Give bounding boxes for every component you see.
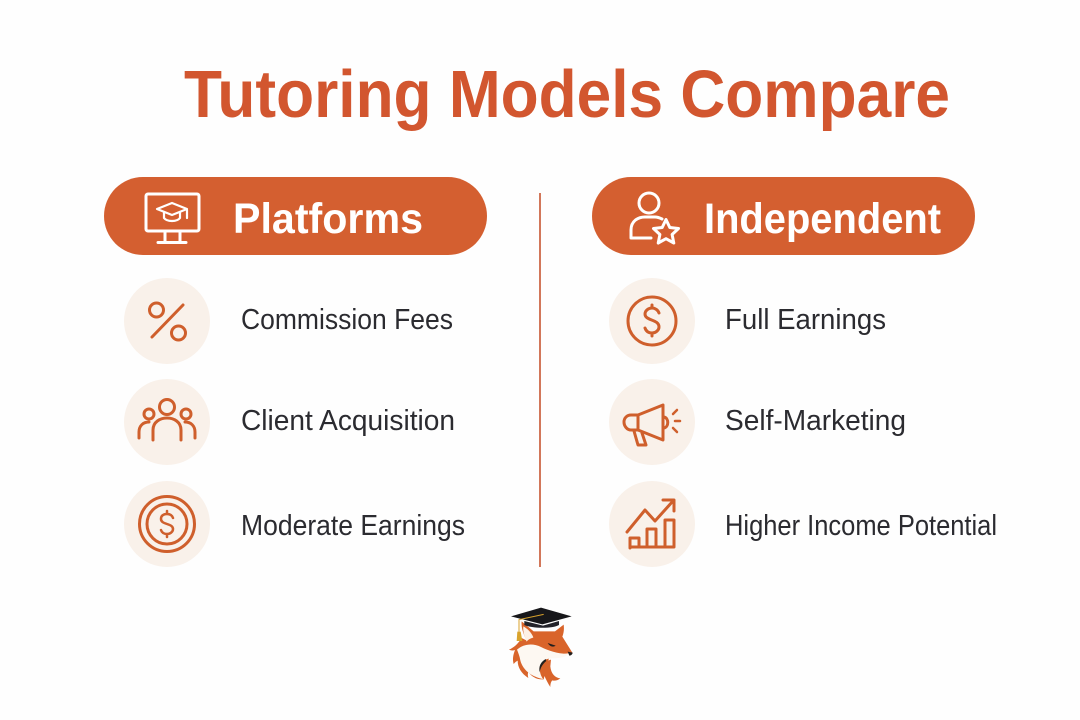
fox mane [509, 638, 550, 679]
item: commission fees [124, 278, 453, 364]
panel: independent [592, 177, 997, 567]
icon: percent [150, 303, 186, 340]
dark eye, nose and jaw line [539, 643, 573, 672]
item: commission fees: Commission Fees [241, 304, 453, 336]
item: full earnings [609, 278, 886, 364]
white chest [517, 644, 569, 679]
icon: fox mascot with graduation cap [509, 608, 573, 687]
item: client acquisition [124, 379, 455, 465]
item: moderate earnings: Moderate Earnings [241, 510, 465, 542]
panel: platforms [104, 177, 487, 567]
item: self-marketing [609, 379, 906, 465]
title: Tutoring Models Compare [184, 57, 950, 132]
item: full earnings: Full Earnings [725, 304, 886, 336]
platforms heading: Platforms [233, 195, 423, 243]
cap tassel [519, 614, 544, 632]
center divider [539, 193, 541, 567]
icon: three people [139, 400, 195, 440]
independent heading: Independent [704, 195, 941, 243]
item: self-marketing: Self-Marketing [725, 405, 906, 437]
item: client acquisition: Client Acquisition [241, 405, 455, 437]
lower neck tuft [541, 660, 560, 687]
fox face and ears [522, 621, 572, 655]
platforms header pill [104, 177, 487, 255]
icon: megaphone [624, 405, 680, 445]
item: higher income potential [609, 481, 997, 567]
graduation cap skirt [524, 621, 559, 628]
icon: dollar coin [140, 496, 194, 552]
icon: growth chart [627, 500, 674, 548]
icon: monitor with graduation cap [146, 194, 199, 242]
item: higher income potential: Higher Income Potential [725, 510, 997, 542]
icon: dollar circle [628, 297, 676, 345]
independent header pill [592, 177, 975, 255]
icon: person with star [631, 193, 678, 243]
item: moderate earnings [124, 481, 465, 567]
graduation cap board [511, 608, 572, 624]
white inner ear [523, 626, 533, 642]
